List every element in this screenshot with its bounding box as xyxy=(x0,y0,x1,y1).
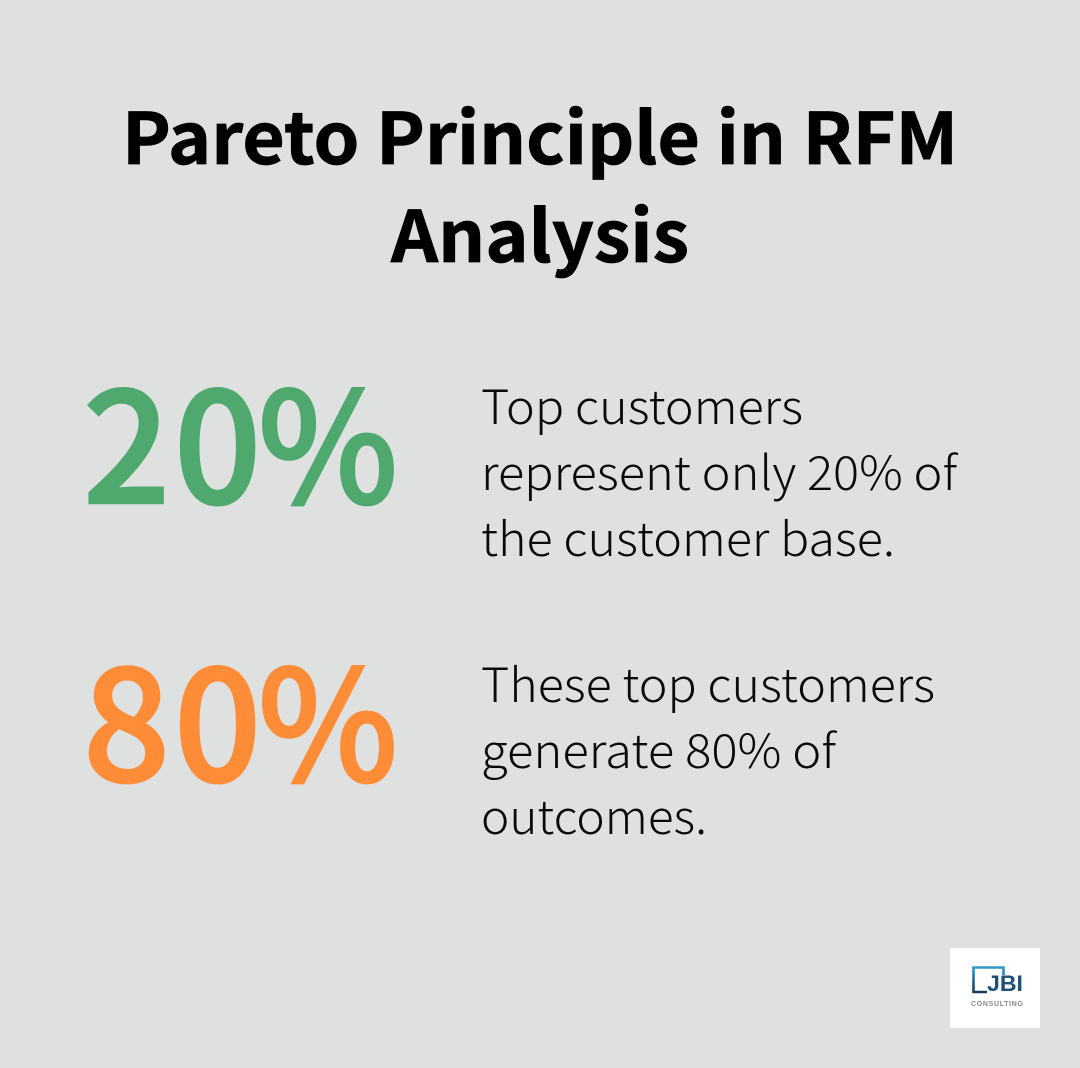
big number 80%: 0 xyxy=(174,605,261,826)
title: Analysis xyxy=(390,181,689,283)
big number 20%: 2 xyxy=(83,327,170,548)
title xyxy=(122,83,958,283)
description for 80%: These top customers xyxy=(481,647,935,716)
big number 80%: % xyxy=(258,605,398,826)
logo: JBI Consulting: CONSULTING xyxy=(971,1001,1024,1008)
description for 80%: outcomes. xyxy=(481,779,707,848)
stat: 80% xyxy=(83,605,935,848)
big number 20%: % xyxy=(258,327,398,548)
stat: 20% xyxy=(83,327,959,570)
description for 20% xyxy=(481,369,959,570)
description for 20%: Top customers xyxy=(481,369,803,438)
big number 80%: 8 xyxy=(83,605,170,826)
title: Pareto Principle in RFM xyxy=(122,83,958,185)
logo: JBI Consulting: JBI xyxy=(987,971,1023,996)
description for 20%: the customer base. xyxy=(481,501,895,570)
description for 80% xyxy=(481,647,935,848)
logo: JBI Consulting xyxy=(950,948,1040,1028)
big number 20%: 0 xyxy=(174,327,261,548)
description for 20%: represent only 20% of xyxy=(481,435,959,504)
description for 80%: generate 80% of xyxy=(481,713,838,782)
